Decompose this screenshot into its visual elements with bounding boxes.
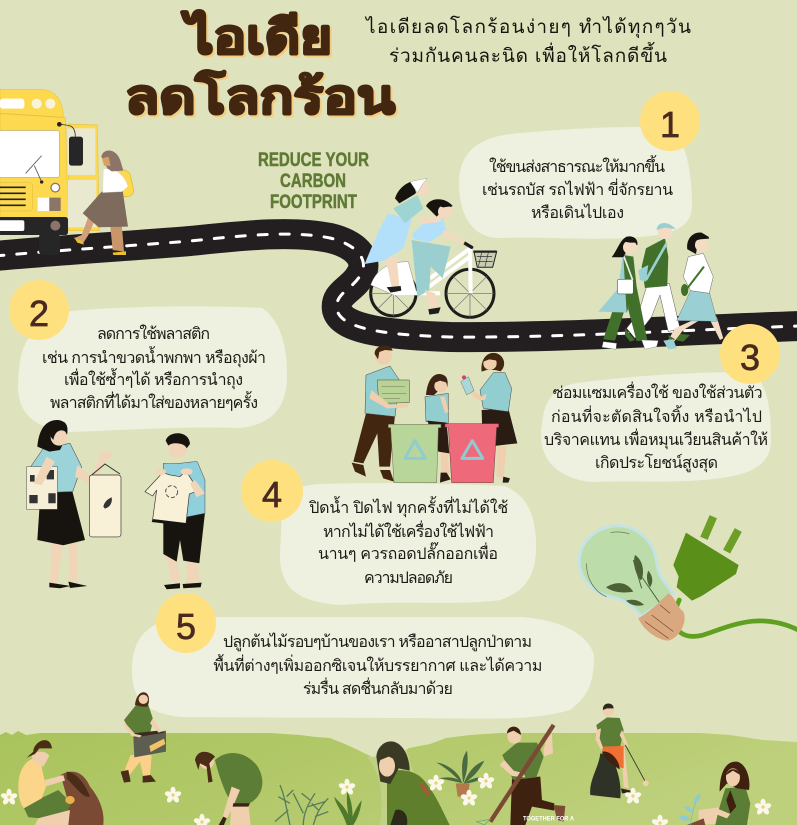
reduce your carbon footprint slogan: CARBON bbox=[280, 171, 346, 192]
volunteer bending to the ground bbox=[195, 752, 262, 825]
speech bubble panel 3 bbox=[541, 324, 780, 482]
tip 3 text: ซ่อมแซมเครื่องใช้ ของใช้ส่วนตัว bbox=[553, 381, 763, 402]
back rider bbox=[365, 178, 429, 293]
icon: light bulb with plant and green plug bbox=[579, 517, 797, 641]
person: woman leaving the bus bbox=[74, 151, 134, 255]
number badge 3 bbox=[720, 324, 780, 384]
tip 2 text: เช่น การนำขวดน้ำพกพา หรือถุงผ้า bbox=[42, 346, 266, 368]
green recycling bin bbox=[388, 424, 441, 483]
shoppers with reusable bags bbox=[27, 420, 205, 589]
number badge 3: 3 bbox=[740, 337, 760, 378]
clean-up volunteers scene, right bbox=[376, 704, 750, 825]
speech bubble panel 1 bbox=[459, 91, 700, 239]
tip 4 text: หากไม่ได้ใช้เครื่องใช้ไฟฟ้า bbox=[323, 520, 494, 541]
grass meadow bbox=[0, 731, 797, 825]
rosemary plant bbox=[275, 785, 328, 825]
title: ลดโลกร้อน bbox=[127, 71, 397, 125]
tip 3 text: ก่อนที่จะตัดสินใจทิ้ง หรือนำไป bbox=[551, 405, 762, 426]
title bbox=[125, 9, 397, 125]
seedling bbox=[679, 793, 700, 825]
reduce your carbon footprint slogan: FOOTPRINT bbox=[270, 192, 357, 213]
volunteer sitting on the grass bbox=[687, 762, 750, 825]
plug cord bbox=[675, 600, 797, 636]
tip 1 text: ใช้ขนส่งสาธารณะให้มากขึ้น bbox=[489, 155, 665, 176]
tip 5 text: พื้นที่ต่างๆเพิ่มออกซิเจนให้บรรยากาศ และได้ความ bbox=[213, 654, 542, 675]
reduce your carbon footprint slogan bbox=[258, 150, 369, 213]
volunteer planting, foreground bbox=[376, 741, 450, 825]
tip 4 text bbox=[309, 496, 508, 587]
clean-up volunteers scene, left bbox=[18, 692, 362, 825]
road bbox=[0, 234, 797, 337]
tip 4 text: นานๆ ควรถอดปลั๊กออกเพื่อ bbox=[318, 542, 498, 563]
speech bubble panel 2 bbox=[9, 280, 287, 432]
volunteer kneeling with sack bbox=[18, 740, 104, 825]
speech bubble panel 5 bbox=[132, 593, 594, 719]
people walking group bbox=[598, 223, 723, 349]
title: ไอเดีย bbox=[180, 9, 332, 63]
tip 5 text: ร่มรื่น สดชื่นกลับมาด้วย bbox=[303, 677, 453, 698]
number badge 5: 5 bbox=[176, 606, 196, 647]
light bulb bbox=[579, 526, 673, 617]
speech bubble panel 4 bbox=[241, 460, 536, 605]
tip 3 text bbox=[544, 381, 768, 473]
number badge 5 bbox=[156, 593, 216, 653]
volunteer with trash bag bbox=[590, 704, 649, 798]
girl at the bins bbox=[425, 374, 450, 479]
subtitle: ไอเดียลดโลกร้อนง่ายๆ ทำได้ทุกๆวัน bbox=[364, 15, 691, 39]
number badge 2: 2 bbox=[29, 293, 49, 334]
tip 5 text bbox=[213, 632, 542, 698]
walker with satchel bbox=[598, 236, 658, 349]
tip 2 text bbox=[42, 324, 266, 412]
title: ไอเดีย bbox=[182, 11, 334, 65]
reduce your carbon footprint slogan: REDUCE YOUR bbox=[258, 150, 369, 171]
subtitle bbox=[364, 15, 691, 67]
tagline: TOGETHER FOR A bbox=[523, 816, 575, 822]
tip 3 text: เกิดประโยชน์สูงสุด bbox=[595, 453, 718, 473]
woman with bottle bbox=[461, 353, 517, 483]
tip 1 text bbox=[482, 155, 673, 222]
recycling family with bins bbox=[352, 345, 517, 483]
tip 2 text: ลดการใช้พลาสติก bbox=[97, 324, 210, 343]
tip 4 text: ความปลอดภัย bbox=[364, 570, 453, 587]
walker in blue skirt bbox=[663, 233, 723, 349]
number badge 4: 4 bbox=[262, 474, 282, 515]
person group: couple on a bicycle bbox=[365, 178, 497, 317]
tip 1 text: เช่นรถบัส รถไฟฟ้า ขี่จักรยาน bbox=[482, 178, 673, 199]
number badge 4 bbox=[241, 460, 303, 522]
bicycle bbox=[371, 243, 497, 317]
volunteer carrying box bbox=[121, 692, 166, 783]
walker with white trousers bbox=[625, 223, 690, 342]
title: ลดโลกร้อน bbox=[125, 69, 395, 123]
volunteer with rake bbox=[476, 725, 565, 825]
number badge 1: 1 bbox=[660, 104, 680, 145]
green plug bbox=[673, 517, 739, 601]
hand holding bulb bbox=[638, 593, 685, 641]
woman holding tote bags bbox=[27, 420, 121, 588]
pink recycling bin bbox=[445, 424, 499, 483]
front rider bbox=[412, 199, 465, 315]
tip 3 text: บริจาคแทน เพื่อหมุนเวียนสินค้าให้ bbox=[544, 428, 768, 450]
man holding recycled t-shirt bbox=[145, 433, 205, 589]
sprouting flower plant bbox=[334, 792, 362, 825]
man carrying box bbox=[352, 345, 409, 482]
potted plant bbox=[436, 751, 484, 797]
number badge 1 bbox=[640, 91, 700, 151]
meadow flowers bbox=[0, 773, 772, 825]
tip 2 text: พลาสติกที่ได้มาใส่ของหลายๆครั้ง bbox=[50, 391, 258, 412]
subtitle: ร่วมกันคนละนิด เพื่อให้โลกดีขึ้น bbox=[389, 42, 667, 67]
tip 1 text: หรือเดินไปเอง bbox=[531, 203, 624, 222]
tip 4 text: ปิดน้ำ ปิดไฟ ทุกครั้งที่ไม่ได้ใช้ bbox=[309, 496, 508, 518]
number badge 2 bbox=[9, 280, 69, 340]
tip 5 text: ปลูกต้นไม้รอบๆบ้านของเรา หรืออาสาปลูกป่าตาม bbox=[223, 632, 532, 652]
icon: school bus bbox=[0, 89, 99, 255]
tip 2 text: เพื่อใช้ซ้ำๆได้ หรือการนำถุง bbox=[64, 368, 243, 390]
